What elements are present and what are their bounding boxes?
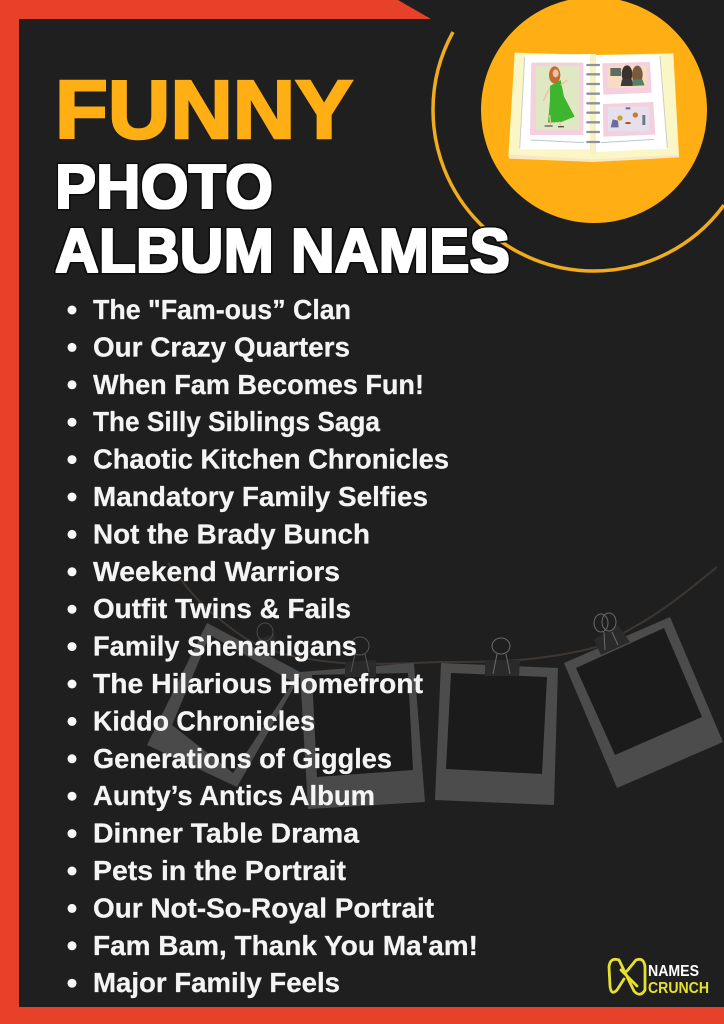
rope — [168, 563, 717, 664]
polaroid 4 — [564, 617, 723, 788]
left page photo — [530, 63, 583, 135]
icon: open photo album — [508, 53, 679, 162]
list entries: Mandatory Family Selfies — [93, 481, 428, 512]
title words: ALBUM NAMES: ALBUM NAMES — [55, 217, 510, 286]
polaroid 3 — [435, 663, 558, 805]
right page — [596, 55, 667, 152]
clip 4 — [594, 613, 630, 655]
list entries: Outfit Twins & Fails — [93, 593, 351, 624]
bullet list of names — [68, 294, 478, 998]
list entries: Our Crazy Quarters — [93, 331, 350, 362]
orange circle — [481, 0, 707, 223]
list entries: Aunty’s Antics Album — [93, 780, 375, 811]
bottom right photo — [603, 102, 655, 137]
list entries: Fam Bam, Thank You Ma'am! — [93, 930, 478, 961]
list entries: Generations of Giggles — [93, 743, 392, 774]
clip 2 — [345, 637, 376, 677]
logo mark — [609, 959, 645, 994]
bullets — [68, 306, 76, 988]
top right photo — [602, 62, 652, 95]
spine strip — [590, 54, 596, 154]
logo: Names Crunch — [609, 959, 709, 997]
decorative polaroids on a rope — [147, 563, 723, 809]
list entries: When Fam Becomes Fun! — [93, 369, 424, 400]
title word: PHOTO: PHOTO — [55, 153, 273, 222]
logo word: NAMES: NAMES — [648, 963, 699, 980]
list entries: Not the Brady Bunch — [93, 518, 370, 549]
list entries: Dinner Table Drama — [93, 818, 360, 849]
list entries: Our Not-So-Royal Portrait — [93, 892, 434, 923]
list entries: The "Fam-ous” Clan — [93, 294, 351, 325]
list entries: The Silly Siblings Saga — [93, 406, 381, 437]
woman in green dress — [543, 66, 575, 127]
list entries: Pets in the Portrait — [93, 855, 346, 886]
title — [55, 63, 510, 286]
page lines — [531, 139, 654, 143]
spiral binding — [587, 65, 599, 142]
left page — [519, 54, 592, 149]
list entries: The Hilarious Homefront — [93, 668, 423, 699]
list entries: Kiddo Chronicles — [93, 705, 315, 736]
polaroid 2 — [300, 663, 425, 809]
album cover — [508, 53, 679, 161]
title word: FUNNY: FUNNY — [55, 63, 353, 156]
list entries: Family Shenanigans — [93, 631, 357, 662]
logo word: CRUNCH: CRUNCH — [648, 980, 709, 997]
list entries: Chaotic Kitchen Chronicles — [93, 444, 449, 475]
clip 1 — [256, 623, 278, 656]
polaroid 1 — [147, 623, 302, 787]
orange ring arc — [433, 32, 724, 271]
clip 3 — [485, 638, 520, 676]
list entries: Major Family Feels — [93, 967, 340, 998]
list entries — [93, 294, 478, 998]
list entries: Weekend Warriors — [93, 556, 340, 587]
